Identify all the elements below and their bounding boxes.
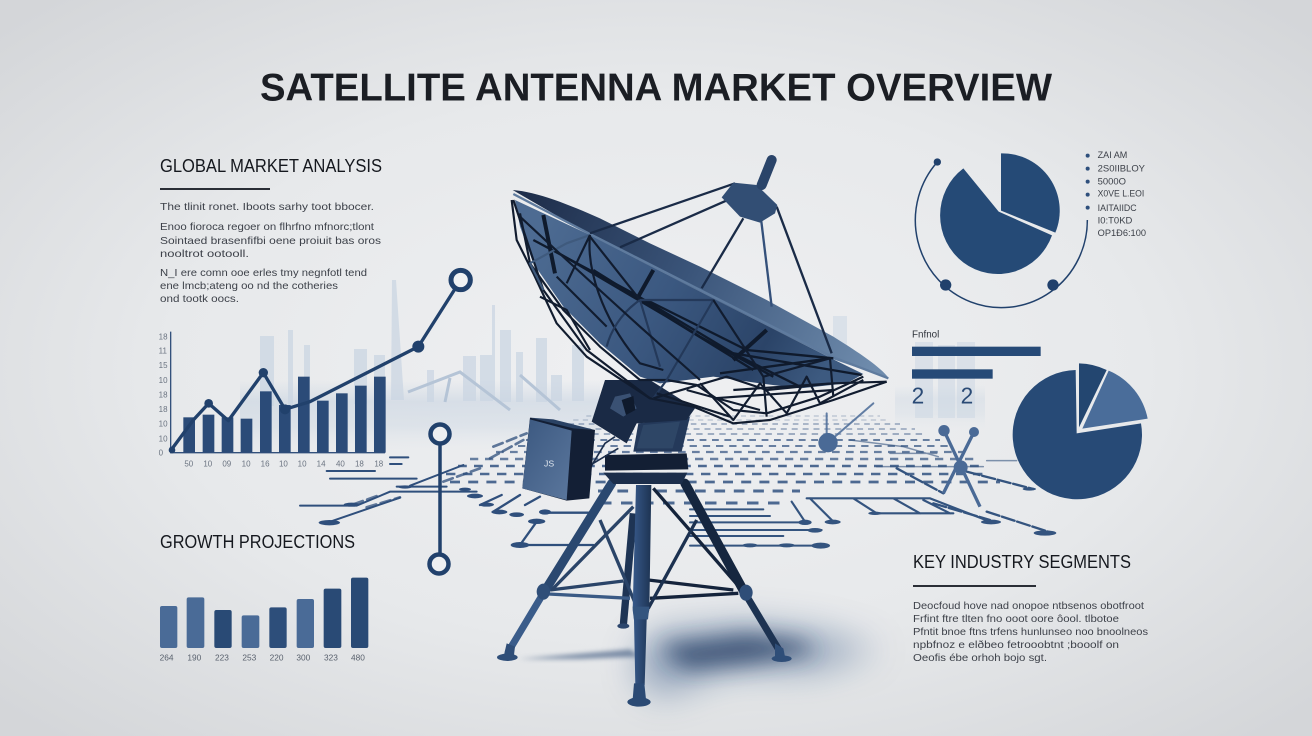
legend: ZAI AM [1098, 150, 1127, 160]
faded skyline backdrop [240, 280, 985, 452]
axis labels: 09 [222, 460, 232, 469]
legend: 2S0IIBLOY [1098, 164, 1146, 174]
trend line with nodes [169, 270, 470, 453]
axis labels: 10 [159, 376, 168, 385]
axis labels: 0 [159, 449, 164, 458]
axis labels: 10 [279, 460, 288, 469]
pie chart [940, 153, 1060, 274]
feed struts [590, 183, 832, 353]
panel: growth projections [160, 532, 368, 662]
cross braces [548, 488, 743, 608]
bar chart: growth: 323 [324, 652, 338, 662]
panel: global market analysis [160, 156, 382, 305]
small label: Fnfnol [912, 329, 939, 340]
body text: ond tootk oocs. [160, 293, 239, 305]
body text [160, 201, 381, 305]
network node with mast [818, 403, 873, 452]
ground shadow [518, 625, 880, 697]
axis labels: 18 [374, 460, 384, 469]
heading: global market analysis: GLOBAL MARKET ANALYSIS [160, 156, 382, 176]
numerals [912, 382, 973, 408]
body text: npbfnoz e elðbeo fetrooobtnt ;booolf on [913, 639, 1119, 651]
dish rim [513, 194, 888, 378]
axis labels: 40 [336, 460, 345, 469]
body text: ene lmcb;ateng oo nd the cotheries [160, 280, 338, 292]
satellite stand [497, 380, 792, 707]
dish back surface [513, 190, 889, 378]
axis labels: 11 [159, 347, 168, 356]
dish inner panels [515, 200, 863, 388]
body text: Sointaed brasenfifbi oene proiuit bas oros [160, 235, 381, 247]
heading rule [913, 585, 1036, 587]
body text: The tlinit ronet. Iboots sarhy toot bbocer. [160, 201, 374, 213]
orbit arc with nodes [915, 158, 1087, 308]
panel: funnel bars and second pie [912, 329, 1148, 507]
legend: OP1Đ6:100 [1098, 228, 1146, 238]
leg collars and feet [497, 584, 792, 662]
body text [913, 600, 1148, 664]
equipment box [522, 418, 595, 501]
axis labels: 18 [159, 405, 168, 414]
axis labels: 50 [184, 460, 194, 469]
chart axes [171, 332, 385, 453]
bar chart: growth: 480 [351, 652, 365, 662]
horizontal bars [912, 347, 1041, 379]
perspective dot grid [446, 416, 1000, 503]
heading: key industry segments: KEY INDUSTRY SEGMENTS [913, 552, 1131, 572]
equipment box: JS [544, 459, 554, 469]
legend: X0VE L.EOI [1098, 189, 1144, 199]
back leg [623, 513, 633, 625]
axis labels: 18 [355, 460, 364, 469]
axis labels: 18 [159, 390, 168, 399]
axis labels: 10 [203, 460, 213, 469]
legend [1086, 150, 1146, 238]
circuit traces right and network node [690, 403, 1056, 549]
numerals: 2 [912, 382, 924, 408]
axis labels: 14 [317, 460, 326, 469]
vertical pin connector [430, 424, 450, 574]
bar chart: growth [160, 578, 368, 662]
front leg [627, 485, 651, 707]
body text: N_I ere comn ooe erles tmy negnfotl tend [160, 267, 367, 279]
legend: 5000O [1098, 177, 1126, 187]
side legs [508, 483, 780, 652]
panel: key industry segments [913, 552, 1148, 664]
body text: nooltrot ootooll. [160, 248, 249, 260]
bar chart: growth: 264 [160, 652, 174, 662]
bar chart: growth: 253 [242, 652, 257, 662]
mount head [590, 380, 695, 484]
legend: IAITAIIDC [1098, 203, 1137, 213]
body text: Frfint ftre tlten fno ooot oore ôool. tlbotoe [913, 613, 1119, 625]
axis labels [159, 332, 384, 469]
axis labels: 10 [159, 419, 168, 428]
body text: Pfntit bnoe ftns trfens hunlunseo noo bnoolneos [913, 626, 1148, 638]
bar chart: growth: 223 [215, 652, 229, 662]
pie chart: industry share [1013, 363, 1148, 499]
body text: Deocfoud hove nad onopoe ntbsenos obotfroot [913, 600, 1144, 612]
bar chart: growth: 220 [270, 652, 284, 662]
combo chart: market bars and trend line [159, 270, 470, 469]
wire frame [512, 200, 887, 423]
bar chart: growth: 190 [187, 652, 202, 662]
axis labels: 16 [261, 460, 270, 469]
panel seams [533, 215, 862, 387]
title: SATELLITE ANTENNA MARKET OVERVIEW [260, 66, 1052, 110]
body text: Oeofis ébe orhoh bojo sgt. [913, 652, 1047, 664]
bars [183, 377, 386, 453]
body text: Enoo fioroca regoer on flhrfno mfnorc;tlont [160, 221, 374, 233]
bar chart: growth: 300 [296, 652, 311, 662]
feed hub [722, 183, 777, 223]
circuit traces left [300, 433, 593, 548]
axis labels: 15 [159, 361, 168, 370]
axis labels: 18 [159, 332, 168, 341]
satellite dish [512, 160, 889, 423]
heading rule [160, 188, 270, 190]
heading: growth projections: GROWTH PROJECTIONS [160, 532, 355, 552]
numerals: 2 [961, 382, 973, 408]
axis labels: 10 [242, 460, 251, 469]
axis labels: 10 [298, 460, 307, 469]
network node icon [938, 425, 980, 507]
axis labels: 10 [159, 434, 168, 443]
legend: I0:T0KD [1098, 215, 1133, 225]
panel: donut arc pie chart and legend [915, 150, 1146, 308]
feed horn [762, 160, 772, 185]
